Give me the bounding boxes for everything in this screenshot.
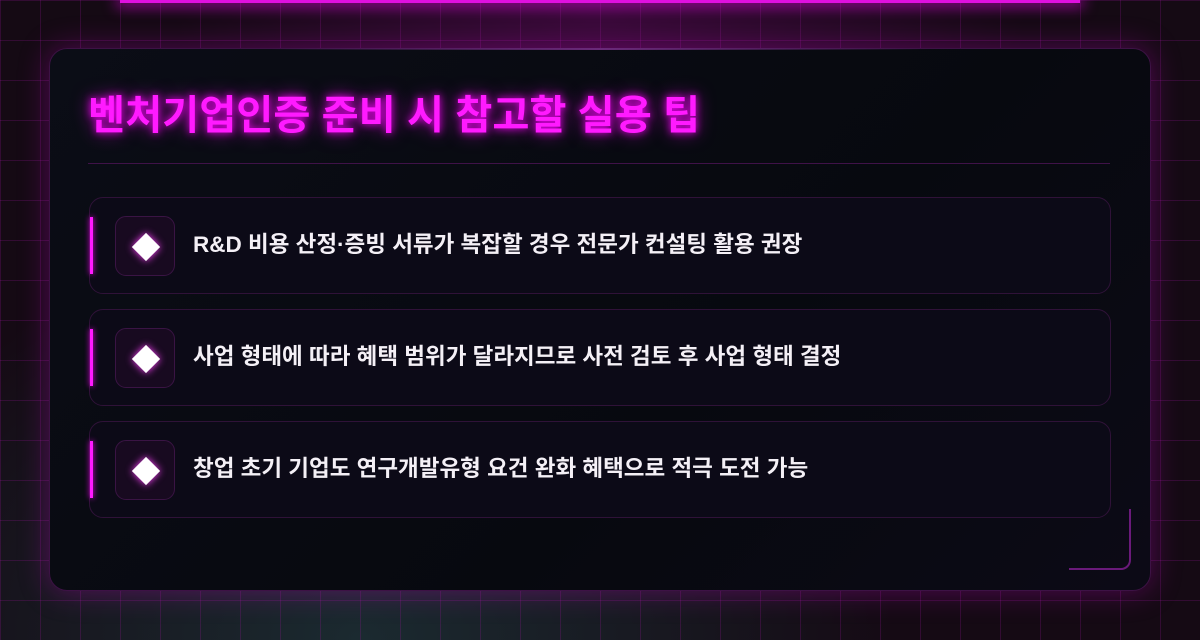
tip 3	[89, 421, 1111, 518]
tip 1	[89, 197, 1111, 294]
icon: diamond	[115, 328, 175, 388]
panel: main card	[49, 48, 1151, 591]
title: 벤처기업인증 준비 시 참고할 실용 팁	[88, 93, 700, 138]
icon: diamond	[115, 216, 175, 276]
tip text 3: 창업 초기 기업도 연구개발유형 요건 완화 혜택으로 적극 도전 가능	[193, 456, 808, 481]
tip text 2: 사업 형태에 따라 혜택 범위가 달라지므로 사전 검토 후 사업 형태 결정	[193, 344, 841, 369]
tip 2	[89, 309, 1111, 406]
icon: diamond	[115, 440, 175, 500]
tip text 1: R&D 비용 산정·증빙 서류가 복잡할 경우 전문가 컨설팅 활용 권장	[193, 232, 802, 257]
